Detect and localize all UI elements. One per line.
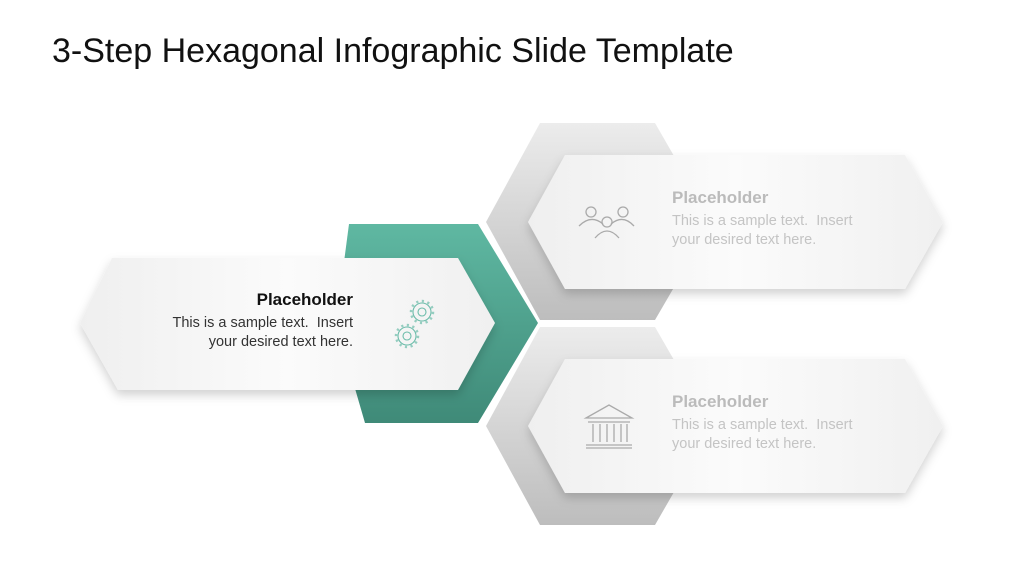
banner: step 2 [528,155,943,289]
text: step 2 [672,188,853,248]
icon: bank [586,405,632,448]
text: step 2: This is a sample text. Insert [672,213,853,229]
text: step 1: your desired text here. [209,334,353,350]
hexagon: green [336,224,538,423]
text: step 3: your desired text here. [672,436,816,452]
text: step 3 [672,392,853,452]
text: step 2: Placeholder [672,188,768,207]
banner: step 3 [528,359,943,493]
text: step 2: your desired text here. [672,232,816,248]
hexagon: top gray [486,123,712,320]
title: 3-Step Hexagonal Infographic Slide Template [52,32,734,70]
text: step 1: This is a sample text. Insert [172,315,353,331]
text: step 3: Placeholder [672,392,768,411]
banner: step 1 [80,258,495,390]
text: step 1 [172,290,353,350]
hexagon: bottom gray [486,327,712,525]
text: step 3: This is a sample text. Insert [672,417,853,433]
icon: people [579,207,634,238]
text: step 1: Placeholder [257,290,353,309]
icon: gears [396,301,433,347]
